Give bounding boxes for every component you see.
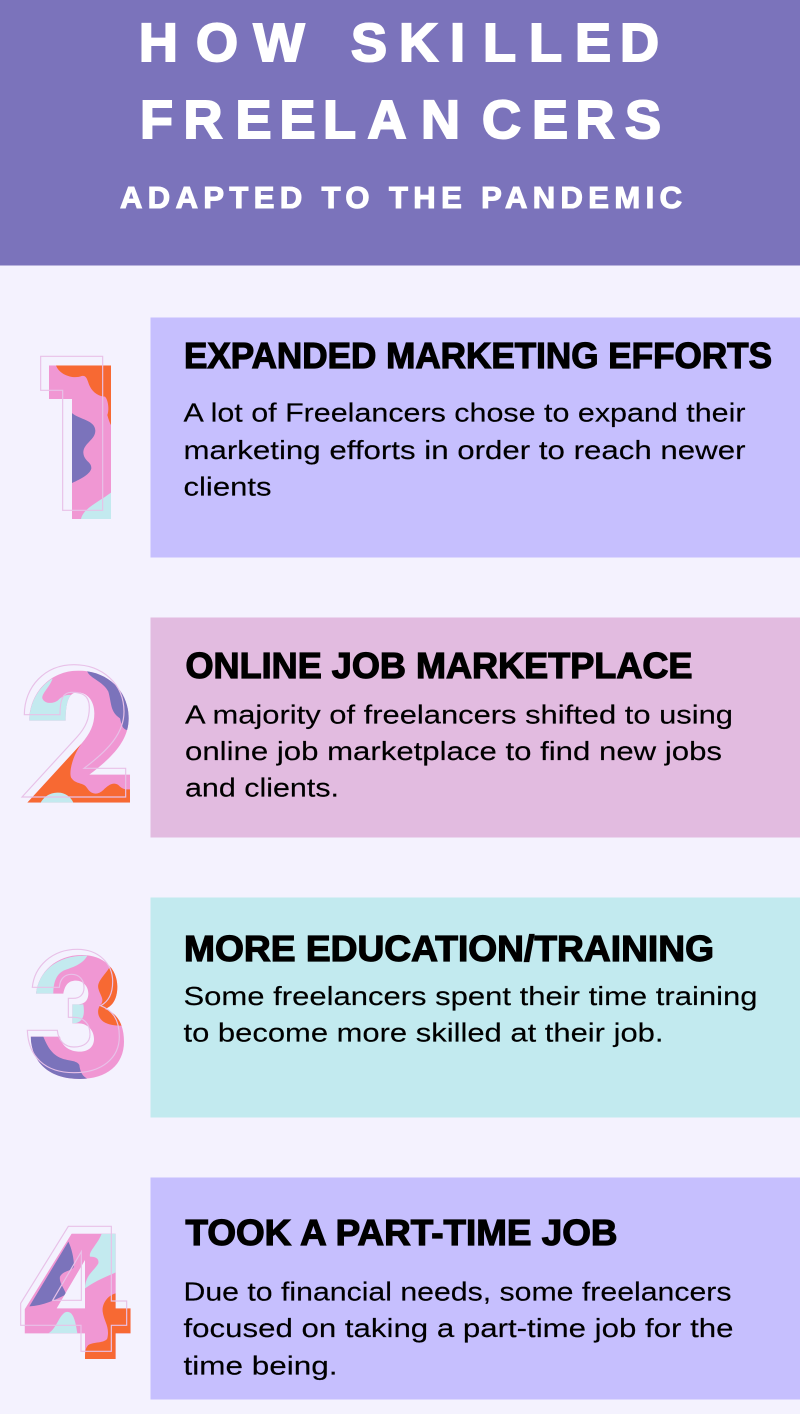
title: HOW SKILLED [139,13,659,73]
heading: ONLINE JOB MARKETPLACE [186,645,692,686]
title [139,13,661,150]
body text: Due to financial needs, some freelancers [184,1276,732,1306]
panel: more education/training [150,898,800,1118]
icon: number 4 [21,1226,133,1362]
body text [184,981,758,1048]
step 3 [27,898,800,1118]
header banner [0,0,800,266]
panel: online job marketplace [150,618,800,838]
panel: took a part-time job [150,1178,800,1400]
heading: MORE EDUCATION/TRAINING [184,928,714,969]
step 4 [21,1178,800,1400]
body text [185,700,733,802]
step 1 [41,318,800,558]
body text: A lot of Freelancers chose to expand their [184,398,746,428]
icon: number 3 [27,949,127,1082]
body text: marketing efforts in order to reach newer [184,435,746,465]
body text: clients [184,472,272,502]
body text: focused on taking a part-time job for the [184,1313,734,1343]
title: FREELANCERS [140,90,661,150]
body text [184,1276,734,1380]
subtitle: ADAPTED TO THE PANDEMIC [120,180,682,215]
body text: and clients. [185,772,339,802]
step 2 [22,618,800,838]
body text: A majority of freelancers shifted to using [185,700,733,730]
icon: number 1 [41,356,113,520]
body text [184,398,746,502]
heading: TOOK A PART-TIME JOB [186,1212,618,1253]
body text: to become more skilled at their job. [184,1018,664,1048]
panel: expanded marketing efforts [150,318,800,558]
body text: time being. [184,1350,338,1380]
body text: Some freelancers spent their time training [184,981,758,1011]
icon: number 2 [22,665,133,807]
body text: online job marketplace to find new jobs [185,736,722,766]
heading: EXPANDED MARKETING EFFORTS [184,335,772,376]
